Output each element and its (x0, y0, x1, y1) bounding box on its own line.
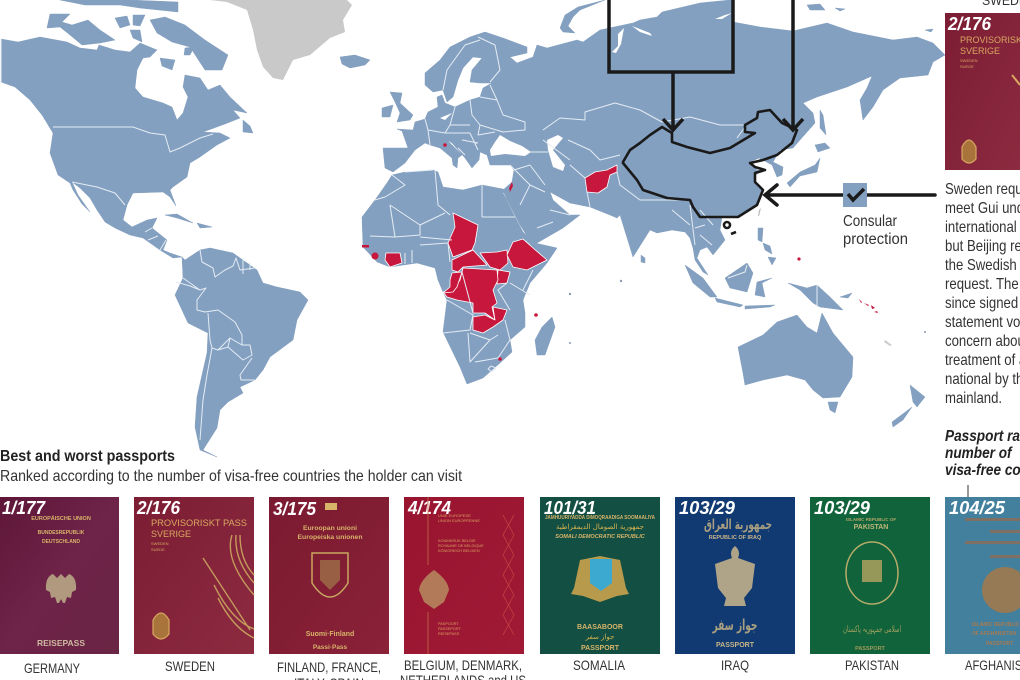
passport: Finland (269, 497, 389, 654)
Ethiopia (507, 239, 547, 270)
passport: Belgium (404, 497, 524, 654)
heading: Best and worst passports (0, 448, 175, 465)
passport: Belgium: ROYAUME DE BELGIQUE (438, 544, 484, 548)
passport: Somalia: BAASABOOR (577, 624, 623, 631)
passport: Finland: 3/175 (273, 499, 317, 519)
passport: Pakistan: PAKISTAN (854, 524, 888, 531)
Central African Republic (452, 250, 487, 272)
passport: Pakistan: اسلامی جمہوریہ پاکستان (843, 625, 901, 635)
passport: Pakistan: 103/29 (814, 498, 870, 518)
passport: Germany: DEUTSCHLAND (42, 539, 80, 545)
text block: Sweden and Gui: the Swedish (945, 257, 1017, 274)
passport: Somalia: SOMALI DEMOCRATIC REPUBLIC (555, 534, 646, 540)
Zambia and Malawi (473, 307, 507, 333)
passport: Belgium: PASPOORT (438, 622, 459, 626)
passport: Iraq (675, 497, 795, 654)
North and Central America (1, 37, 247, 258)
Uganda (497, 270, 510, 284)
country borders (1, 37, 817, 440)
text block: Sweden and Gui: mainland. (945, 390, 1002, 407)
passport: Afghanistan: OF AFGHANISTAN (972, 631, 1017, 637)
consular protection label: Consular (843, 213, 897, 230)
passport: Germany: REISEPASS (37, 638, 85, 648)
passport: Belgium: UNIE EUROPESE (438, 513, 471, 518)
passport: Iraq: جواز سفر (712, 616, 758, 634)
passport: Pakistan: PASSPORT (855, 646, 886, 652)
passport: Sweden (134, 497, 254, 654)
passport: Belgium: PASSEPORT (438, 627, 462, 631)
consular protection label (843, 213, 908, 248)
passport: Afghanistan (945, 497, 1020, 654)
South America (175, 248, 308, 457)
passport: Iraq: جمهورية العراق (704, 517, 772, 533)
rank: 2/176 (947, 14, 992, 34)
passport: Pakistan: ISLAMIC REPUBLIC OF (846, 517, 896, 522)
passport: Somalia: 101/31 (544, 498, 596, 518)
Eurasia (383, 0, 945, 275)
Cuba (165, 214, 212, 228)
passport: Sweden, right column: SVERIGE (960, 46, 1000, 56)
callout box with arrow to China (609, 0, 733, 130)
passport: Finland: Passi·Pass (313, 644, 348, 651)
label Belgium: BELGIUM, DENMARK, (404, 657, 522, 673)
passport: Afghanistan: ISLAMIC REPUBLIC (972, 622, 1020, 628)
Southeast Asia islands (685, 228, 852, 310)
Sakhalin and Japan (776, 110, 830, 187)
Arctic islands (47, 14, 115, 45)
Afghanistan (585, 165, 617, 193)
note: passport rank legend: number of (945, 445, 1014, 462)
icon: consular protection check (843, 183, 867, 207)
note: passport rank legend (945, 428, 1020, 479)
land masses (1, 0, 945, 457)
passport: Germany: 1/177 (2, 498, 46, 518)
Chad (448, 213, 478, 257)
Madagascar (535, 317, 555, 355)
passport: Sweden, right column: SWEDEN (960, 58, 978, 63)
passport: Afghanistan: PASSPORT (986, 641, 1013, 647)
Cote d'Ivoire (385, 253, 402, 267)
passport: Sweden: SWEDEN (151, 541, 169, 546)
consular protection label: protection (843, 231, 908, 248)
callout line with arrow to north-east China (783, 0, 803, 130)
passport: Afghanistan: 104/25 (949, 498, 1006, 518)
small red countries (362, 143, 878, 361)
label Somalia: SOMALIA (573, 657, 626, 673)
Hainan and islands (724, 222, 730, 228)
passport: Sweden: 2/176 (136, 498, 181, 518)
Novaya Zemlya (560, 0, 605, 33)
passport: Iraq: PASSPORT (716, 642, 755, 649)
passport: Sweden, right column: SUEDE (960, 64, 974, 69)
passport: Sweden: SUEDE (151, 547, 165, 552)
Sri Lanka (641, 255, 645, 263)
label Germany: GERMANY (24, 660, 81, 676)
label Finland: FINLAND, FRANCE, (277, 659, 381, 675)
arrow: consular protection (765, 185, 935, 205)
British Isles (382, 92, 413, 122)
Newfoundland (243, 120, 253, 133)
passport: Sweden: PROVISORISKT PASS (151, 518, 247, 528)
passport: Germany: BUNDESREPUBLIK (38, 530, 85, 536)
passport: Somalia: جواز سفر (585, 633, 614, 641)
subheading: Ranked according to the number of visa-free countries the holder can visit (0, 468, 462, 485)
passport: Sweden, right column (945, 13, 1020, 170)
passport: Iraq: 103/29 (679, 498, 735, 518)
passport: Finland: Suomi·Finland (306, 631, 354, 638)
passport: Pakistan (810, 497, 930, 654)
passport: Belgium: REISEPASS (438, 632, 460, 636)
passport: Finland: Euroopan unioni (303, 525, 357, 532)
passport: Somalia: جمهورية الصومال الديمقراطية (556, 523, 644, 531)
inland seas (440, 13, 760, 171)
label Pakistan: PAKISTAN (845, 657, 899, 673)
passport: Belgium: UNION EUROPÉENNE (438, 518, 480, 523)
Arctic Russian islands (807, 4, 933, 32)
South Sudan (480, 250, 508, 270)
passport: Somalia: PASSPORT (581, 645, 620, 652)
red: low-ranked passport countries (385, 165, 617, 333)
passport: Belgium: KONINKRIJK BELGIË (438, 539, 476, 543)
passport: Iraq: REPUBLIC OF IRAQ (709, 535, 762, 541)
Republic of Congo (443, 272, 462, 293)
Greenland (210, 0, 352, 80)
world map (1, 0, 945, 457)
passport: Somalia (540, 497, 660, 654)
China outline (623, 110, 797, 234)
tick to rank label (967, 485, 969, 497)
passport: Belgium: KÖNIGREICH BELGIEN (438, 549, 480, 553)
text block: Sweden and Gui (945, 181, 1020, 407)
Australia (738, 313, 853, 413)
passport: Germany: EUROPÄISCHE UNION (31, 515, 91, 522)
label Belgium (400, 657, 526, 680)
passport: Belgium: 4/174 (407, 498, 451, 518)
small grey islands (569, 208, 926, 346)
label Iraq: IRAQ (721, 657, 749, 673)
passport: Germany (0, 497, 119, 654)
Iceland (340, 55, 370, 68)
Democratic Republic of Congo (443, 268, 498, 320)
Africa (362, 170, 557, 384)
passport: Finland: Europeiska unionen (298, 534, 362, 541)
New Zealand (892, 385, 925, 427)
passport: Somalia: JAMHUURIYADDA DIMOQRAADIGA SOOMAALIYA (545, 515, 655, 521)
passport: Sweden: SVERIGE (151, 529, 191, 539)
label Finland (277, 659, 381, 680)
label Sweden: SWEDEN (165, 658, 215, 674)
